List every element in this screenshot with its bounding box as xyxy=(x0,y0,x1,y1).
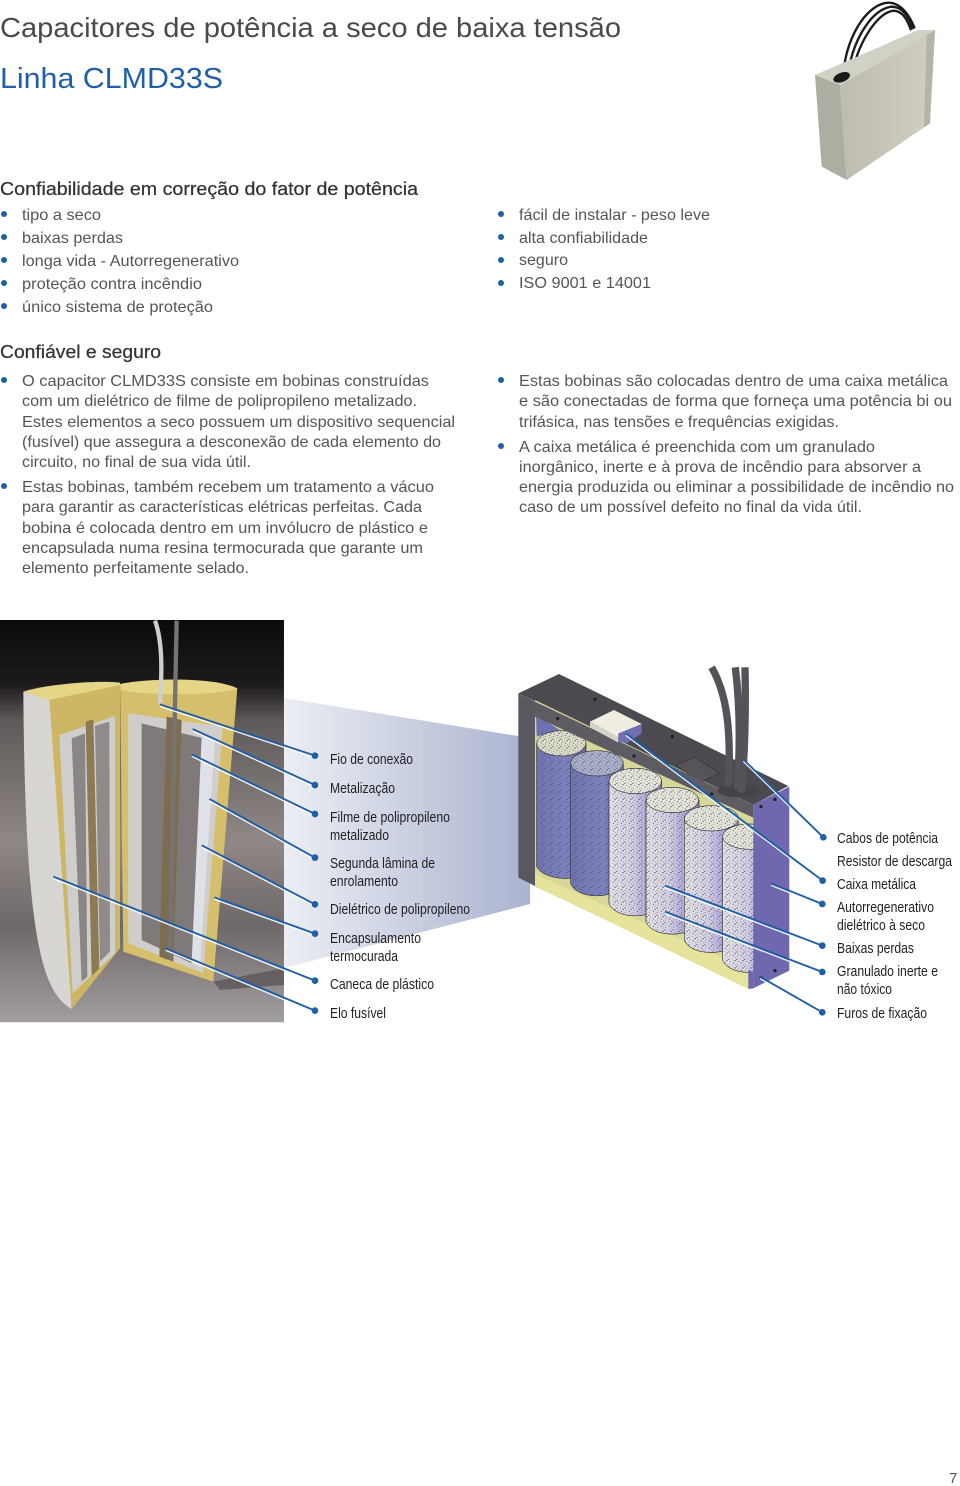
text block: right column: energia produzida ou eliminar a possibilidade de incêndio no xyxy=(519,479,954,496)
labels: left diagram: Encapsulamento xyxy=(330,930,421,947)
projection beam between the diagrams xyxy=(284,698,530,968)
text block: left column: O capacitor CLMD33S consiste em bobinas construídas xyxy=(22,373,429,390)
labels: right diagram: dielétrico à seco xyxy=(837,917,925,934)
icon: cables xyxy=(843,3,914,72)
subtitle: Linha CLMD33S xyxy=(0,63,223,95)
labels: left diagram: Dielétrico de polipropileno xyxy=(330,901,470,918)
wires xyxy=(155,621,177,960)
labels: left diagram xyxy=(330,751,470,1022)
text block: left column: (fusível) que assegura a desconexão de cada elemento do xyxy=(22,434,441,451)
text block: left column: com um dielétrico de filme de polipropileno metalizado. xyxy=(22,393,417,410)
labels: left diagram: Filme de polipropileno xyxy=(330,809,450,826)
power cables xyxy=(712,667,759,797)
labels: right diagram xyxy=(837,830,953,1022)
text block: left column: bobina é colocada dentro em um invólucro de plástico e xyxy=(22,520,428,537)
product photo: capacitor xyxy=(815,3,935,180)
heading: confiabilidade: Confiabilidade em correção do fator de potência xyxy=(0,179,419,199)
text block: left column xyxy=(1,373,455,577)
text block: right column: A caixa metálica é preenchida com um granulado xyxy=(519,439,875,456)
labels: left diagram: Caneca de plástico xyxy=(330,976,434,993)
text block: right column xyxy=(498,373,954,516)
text block: left column: elemento perfeitamente selado. xyxy=(22,560,249,577)
front bar and end plates xyxy=(518,693,789,989)
text block: left column: Estes elementos a seco possuem um dispositivo sequencial xyxy=(22,414,455,431)
coils xyxy=(537,731,777,972)
bullet list: right features: seguro xyxy=(519,252,568,269)
text block: right column: trifásica, nas tensões e frequências exigidas. xyxy=(519,414,839,431)
labels: right diagram: Cabos de potência xyxy=(837,830,939,847)
bullet list: right features: ISO 9001 e 14001 xyxy=(519,275,651,292)
bullet list: right features xyxy=(498,207,710,292)
text block: left column: Estas bobinas, também recebem um tratamento a vácuo xyxy=(22,479,434,496)
text block: right column: caso de um possível defeito no final da vida útil. xyxy=(519,499,862,516)
text block: right column: inorgânico, inerte e à prova de incêndio para absorver a xyxy=(519,459,921,476)
text block: left column: encapsulada numa resina termocurada que garante um xyxy=(22,540,423,557)
bullet list: left features: baixas perdas xyxy=(22,230,123,247)
text block: left column: circuito, no final de sua vida útil. xyxy=(22,454,251,471)
labels: right diagram: Caixa metálica xyxy=(837,876,917,893)
bullet list: left features: proteção contra incêndio xyxy=(22,276,202,293)
cutaway illustration: capacitor element xyxy=(0,620,284,1022)
heading: confiável e seguro: Confiável e seguro xyxy=(0,342,161,362)
title: Capacitores de potência a seco de baixa tensão xyxy=(0,12,621,43)
bullet list: left features xyxy=(1,207,239,316)
labels: left diagram: Metalização xyxy=(330,780,395,797)
labels: left diagram: Elo fusível xyxy=(330,1005,386,1022)
bullet list: left features: tipo a seco xyxy=(22,207,101,224)
callout lines: left diagram xyxy=(53,704,318,1014)
bullet list: left features: longa vida - Autorregenerativo xyxy=(22,253,239,270)
labels: left diagram: Fio de conexão xyxy=(330,751,413,768)
box back and top xyxy=(518,674,788,989)
text block: right column: Estas bobinas são colocadas dentro de uma caixa metálica xyxy=(519,373,948,390)
labels: right diagram: Granulado inerte e xyxy=(837,963,938,980)
text block: left column: para garantir as características elétricas perfeitas. Cada xyxy=(22,499,422,516)
bullet list: left features: único sistema de proteção xyxy=(22,299,213,316)
bullet list: right features: fácil de instalar - peso leve xyxy=(519,207,710,224)
labels: right diagram: Baixas perdas xyxy=(837,940,914,957)
cutaway illustration: metal box with coils xyxy=(518,667,789,989)
text block: right column: e são conectadas de forma que forneça uma potência bi ou xyxy=(519,393,952,410)
labels: left diagram: enrolamento xyxy=(330,873,398,890)
labels: left diagram: Segunda lâmina de xyxy=(330,855,435,872)
left half shell xyxy=(23,682,120,1009)
right half shell xyxy=(120,680,237,982)
labels: right diagram: Furos de fixação xyxy=(837,1005,927,1022)
labels: right diagram: não tóxico xyxy=(837,981,892,998)
bullet list: right features: alta confiabilidade xyxy=(519,230,648,247)
discharge resistor xyxy=(590,710,642,743)
labels: right diagram: Autorregenerativo xyxy=(837,899,934,916)
labels: left diagram: termocurada xyxy=(330,948,399,965)
callout lines: right diagram xyxy=(626,733,827,1016)
labels: left diagram: metalizado xyxy=(330,827,389,844)
